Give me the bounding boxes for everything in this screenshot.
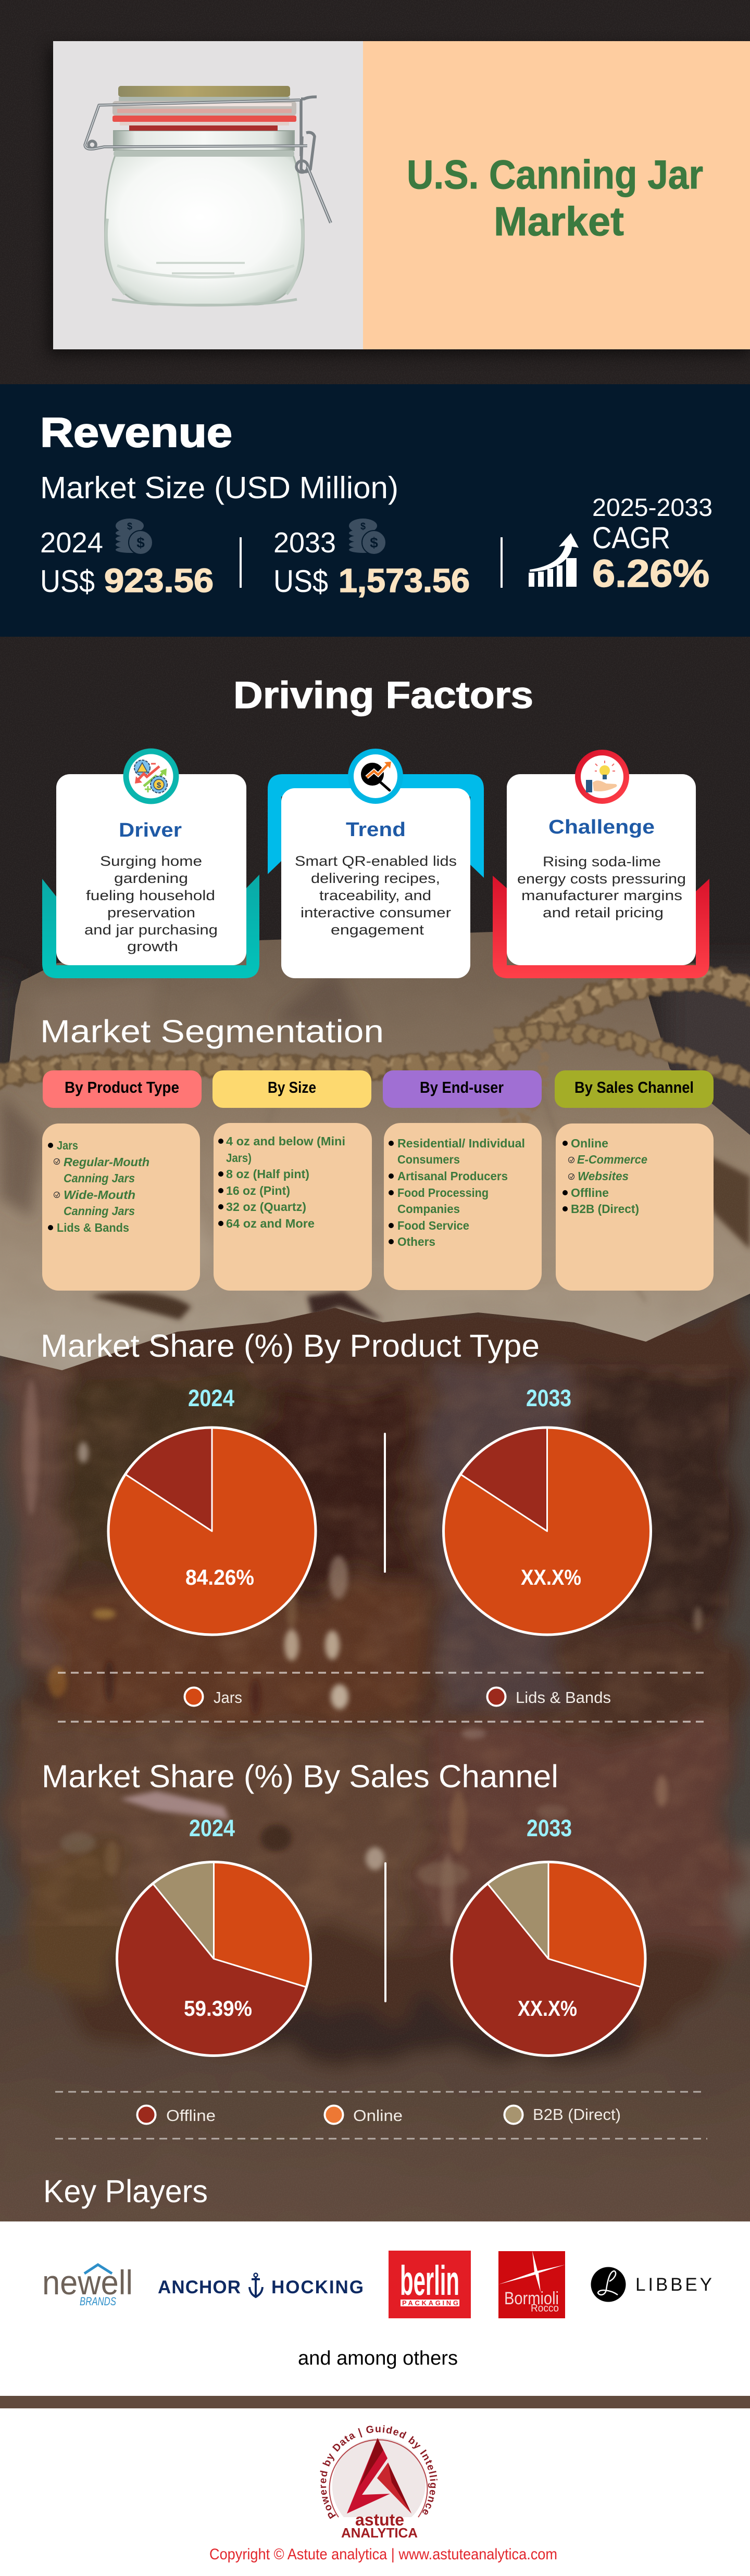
card text: [517, 854, 686, 920]
card text: and retail pricing: [543, 905, 664, 920]
legend: product type: [184, 1688, 611, 1707]
metric: CAGR: 6.26%: [592, 552, 709, 595]
segment list: Lids & Bands: [57, 1221, 129, 1234]
logo: astute analytica: ANALYTICA: [341, 2525, 418, 2541]
heading: driving factors: Driving Factors: [233, 675, 533, 716]
heading: market share by product type: Market Share (%) By Product Type: [41, 1328, 540, 1363]
panel: driver card: [42, 751, 259, 978]
segment list: Online: [571, 1137, 608, 1150]
icon: gears with arrows: [126, 751, 176, 801]
segment list: [42, 1123, 200, 1291]
pie chart: [443, 1428, 651, 1635]
logo: astute analytica: astute: [355, 2510, 404, 2529]
card text: Rising soda-lime: [543, 854, 661, 869]
metric: 2033 value: [273, 526, 470, 599]
metric: 2024 value: 2024: [40, 526, 103, 559]
segment header: By Product Type: [65, 1078, 179, 1096]
panel: challenge card: [493, 753, 709, 978]
heading: market segmentation: Market Segmentation: [40, 1014, 384, 1049]
segment list: B2B (Direct): [571, 1202, 639, 1216]
icon: coins 2024: $: [136, 535, 145, 551]
footer band: [0, 2396, 750, 2408]
value: XX.X%: [518, 1996, 577, 2021]
logo: bormioli rocco: Rocco: [531, 2303, 559, 2314]
panel: by end-user: [383, 1070, 542, 1290]
legend: product type: Lids & Bands: [516, 1688, 611, 1707]
logo: libbey: [591, 2267, 712, 2302]
card text: delivering recipes,: [311, 870, 440, 886]
card title: Trend: [346, 819, 406, 841]
legend: sales channel: [138, 2105, 621, 2125]
segment list: 4 oz and below (Mini: [226, 1134, 345, 1148]
segment header: [383, 1070, 542, 1108]
icon: magnifier with rising arrow: [351, 752, 400, 801]
segment header: [555, 1070, 714, 1108]
logo: anchor hocking: [158, 2273, 364, 2297]
icon: coins 2033: [349, 519, 386, 554]
segment list: [214, 1123, 372, 1291]
legend: sales channel: Online: [353, 2106, 403, 2125]
year label: 2024: [188, 1385, 234, 1411]
card title: Driver: [119, 819, 182, 841]
icon: coins 2033: $: [370, 535, 378, 551]
metric: 2024 value: [40, 526, 214, 599]
metric: 2033 value: 2033: [273, 526, 336, 559]
panel: trend card: [268, 752, 484, 978]
card text: gardening: [114, 870, 188, 886]
logo: berlin packaging: [389, 2251, 471, 2318]
icon: hand holding light bulb: [578, 753, 626, 801]
segment list: Others: [397, 1235, 435, 1248]
title: U.S. Canning Jar: [407, 151, 703, 197]
logo: newell brands: BRANDS: [80, 2295, 116, 2308]
icon: gears with arrows: $: [157, 781, 161, 790]
card text: interactive consumer: [301, 905, 451, 920]
segment list: E-Commerce: [577, 1153, 647, 1166]
logo: bormioli rocco: Bormioli: [504, 2289, 559, 2308]
metric: 2024 value: US$: [40, 564, 95, 599]
segment list: 16 oz (Pint): [226, 1184, 290, 1197]
segment list: Jars): [226, 1151, 252, 1165]
heading: revenue: Revenue: [40, 409, 232, 456]
segment list: Regular-Mouth: [64, 1155, 149, 1169]
card text: manufacturer margins: [521, 888, 682, 903]
panel: footer: [0, 2408, 750, 2576]
heading: market share by sales channel: Market Share (%) By Sales Channel: [42, 1759, 558, 1794]
logo: anchor hocking: HOCKING: [271, 2277, 364, 2297]
chart: sales channel 2033: [452, 1815, 645, 2056]
subheading: market size: Market Size (USD Million): [40, 471, 398, 505]
segment list: Wide-Mouth: [64, 1188, 135, 1202]
title panel: [363, 41, 750, 349]
segment list: Food Processing: [397, 1186, 489, 1199]
divider: [501, 537, 503, 588]
icon: coins 2033: $: [360, 521, 366, 532]
value: XX.X%: [521, 1565, 581, 1589]
segment list: Offline: [571, 1186, 609, 1199]
card text: [84, 853, 218, 954]
text: and among others: and among others: [298, 2347, 458, 2369]
icon: glass canning jar: [85, 86, 331, 305]
segment list: Websites: [578, 1169, 629, 1183]
segment list: [556, 1123, 714, 1291]
segment list: Artisanal Producers: [397, 1169, 508, 1183]
logo: anchor hocking: ANCHOR: [158, 2277, 241, 2297]
card text: Surging home: [100, 853, 202, 869]
heading: key players: Key Players: [43, 2174, 208, 2209]
card text: growth: [127, 939, 178, 954]
legend: sales channel: B2B (Direct): [533, 2105, 621, 2124]
copyright: Copyright © Astute analytica | www.astuteanalytica.com: [209, 2546, 557, 2563]
year label: 2033: [526, 1385, 571, 1411]
card text: engagement: [331, 922, 424, 938]
segment list: Canning Jars: [64, 1171, 135, 1185]
segment header: By Size: [268, 1078, 316, 1096]
metric: CAGR: [592, 494, 712, 595]
icon: coins 2024: [116, 519, 153, 554]
segment header: [43, 1070, 202, 1108]
card text: traceability, and: [319, 888, 431, 903]
value: 84.26%: [185, 1565, 254, 1589]
card text: and jar purchasing: [84, 922, 218, 938]
metric: 2033 value: US$: [273, 564, 328, 599]
logo: newell brands: newell: [42, 2263, 133, 2302]
rope tied around the burlap: [0, 973, 750, 1153]
icon: coins 2024: $: [127, 521, 132, 532]
card title: Challenge: [548, 816, 655, 838]
segment list: 64 oz and More: [226, 1217, 315, 1230]
segment list: Food Service: [397, 1219, 469, 1232]
segment header: By End-user: [420, 1078, 504, 1096]
card text: [295, 853, 457, 938]
logo: astute analytica: Powered by Data | Guided by Intelligence: [320, 2425, 438, 2519]
pie chart: [117, 1862, 311, 2056]
logo: berlin packaging: berlin: [400, 2257, 459, 2304]
card text: fueling household: [86, 888, 215, 903]
segment header: By Sales Channel: [574, 1078, 694, 1096]
segment list: Companies: [397, 1202, 460, 1216]
icon: growth chart: [529, 533, 579, 587]
chart: product type 2024: [108, 1385, 316, 1635]
card text: energy costs pressuring: [517, 871, 686, 887]
logo: libbey: LIBBEY: [635, 2275, 712, 2295]
logo: berlin packaging: PACKAGING: [402, 2299, 458, 2307]
pie chart: [452, 1862, 645, 2056]
segment list: [384, 1123, 542, 1290]
chart: sales channel 2024: [117, 1815, 311, 2056]
card text: preservation: [107, 905, 195, 920]
year label: 2024: [189, 1815, 235, 1841]
segment list: Jars: [57, 1139, 78, 1152]
metric: CAGR: 2025-2033: [592, 494, 712, 522]
metric: 2024 value: 923.56: [104, 562, 214, 599]
metric: 2033 value: 1,573.56: [339, 562, 470, 599]
year label: 2033: [527, 1815, 572, 1841]
panel: by size: [213, 1070, 372, 1291]
title panel: Market: [494, 198, 624, 244]
chart: product type 2033: [443, 1385, 651, 1635]
segment list: 8 oz (Half pint): [226, 1167, 309, 1181]
metric: CAGR: CAGR: [592, 521, 670, 555]
pie chart: [108, 1428, 316, 1635]
segment list: Consumers: [397, 1153, 460, 1166]
segment list: Canning Jars: [64, 1204, 135, 1218]
jar photo panel: [53, 41, 363, 349]
value: 59.39%: [184, 1996, 252, 2021]
divider: [384, 1433, 386, 1573]
divider: [240, 537, 242, 588]
segment list: Residential/ Individual: [397, 1137, 525, 1150]
segment header: [213, 1070, 371, 1108]
panel: by sales channel: [555, 1070, 714, 1291]
card text: Smart QR-enabled lids: [295, 853, 457, 869]
panel: revenue: [0, 384, 750, 637]
divider: [384, 1862, 386, 2002]
header panel: [48, 41, 750, 355]
logo: bormioli rocco: [498, 2251, 565, 2318]
panel: by product type: [42, 1070, 202, 1291]
legend: sales channel: Offline: [166, 2106, 216, 2125]
panel: key players logos: [0, 2221, 750, 2396]
segment list: 32 oz (Quartz): [226, 1200, 306, 1214]
legend: product type: Jars: [214, 1688, 242, 1707]
